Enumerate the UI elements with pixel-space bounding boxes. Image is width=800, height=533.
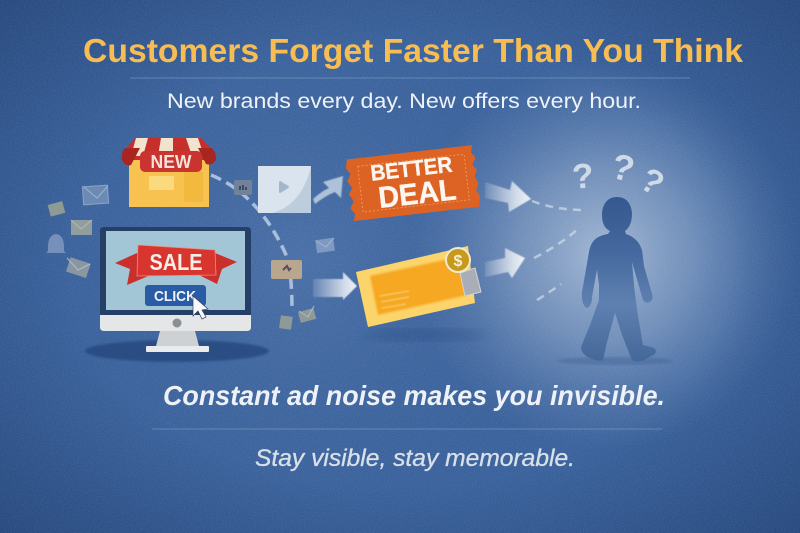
arrow: coupon to person: [485, 248, 525, 278]
arrow: better deal to person: [485, 181, 531, 212]
sale banner: [115, 245, 237, 285]
question marks: ?: [607, 145, 639, 190]
closing line: Stay visible, stay memorable.: [255, 445, 575, 472]
icon: scattered envelopes and bell: [46, 180, 335, 330]
icon: better deal ticket: BETTER: [369, 152, 454, 186]
cursor: [193, 296, 208, 319]
question marks: ?: [634, 160, 670, 204]
question marks: ?: [571, 156, 595, 197]
icon: yellow coupon: $: [454, 253, 463, 270]
icon: yellow coupon: [356, 246, 485, 341]
dashed lines to person: [532, 201, 585, 300]
subtitle: New brands every day. New offers every hour.: [167, 90, 641, 113]
click button: [145, 285, 206, 306]
icon: video card: [258, 166, 311, 213]
icon: store with NEW sign: NEW: [150, 152, 192, 172]
statement: Constant ad noise makes you invisible.: [163, 380, 665, 411]
dashed path from store to envelopes: [211, 175, 292, 310]
question marks: [571, 145, 670, 204]
icon: better deal ticket: [345, 145, 481, 221]
icon: better deal ticket: DEAL: [377, 173, 458, 215]
click button: CLICK: [154, 288, 196, 305]
person silhouette: [557, 197, 673, 365]
arrow: video to better deal: [313, 176, 343, 204]
sale banner: SALE: [150, 249, 202, 275]
title: Customers Forget Faster Than You Think: [83, 32, 744, 69]
icon: store with NEW sign: [122, 138, 216, 207]
icon: computer monitor with sale banner: [85, 227, 269, 362]
arrow: envelopes to coupon: [313, 272, 357, 300]
